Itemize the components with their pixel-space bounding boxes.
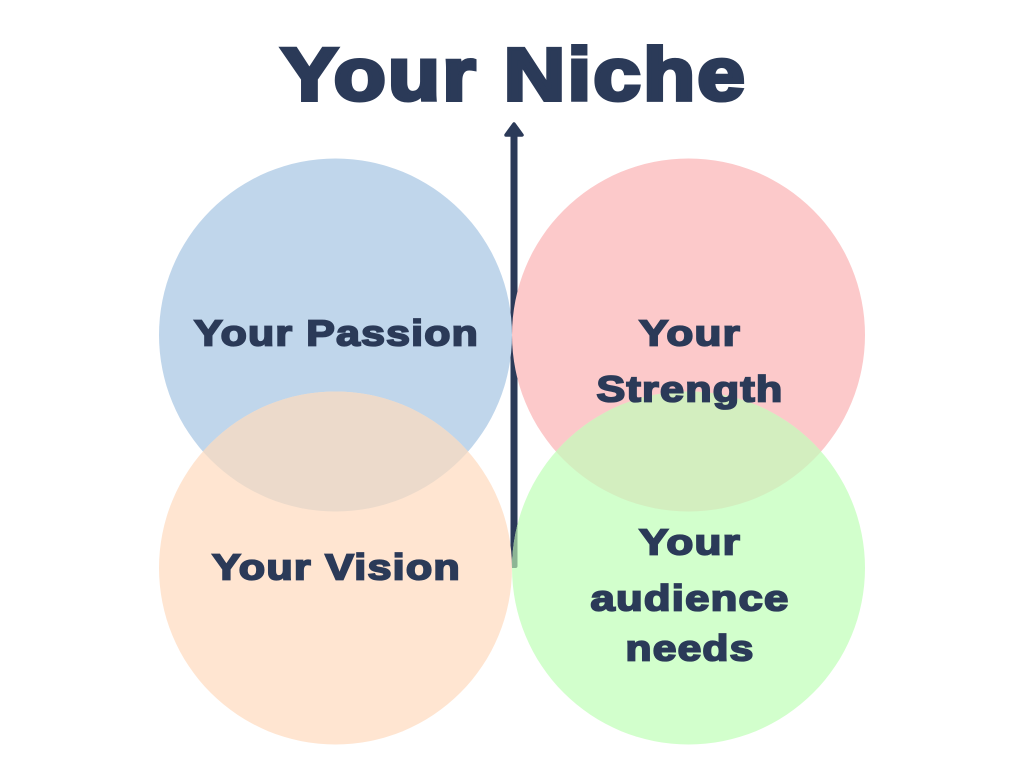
circle: your vision: [159, 392, 512, 744]
label: your strength: Strength: [596, 368, 784, 410]
label: your vision: Your Vision: [212, 546, 461, 588]
overlap: passion and vision: [203, 392, 468, 512]
label: your audience needs: [590, 522, 790, 668]
label: your audience needs: audience: [590, 578, 790, 618]
circle: your audience needs: [512, 392, 865, 744]
circle: your strength: [512, 158, 865, 512]
label: your strength: Your: [639, 312, 741, 354]
circle: your passion: [159, 158, 512, 512]
label: your strength: [596, 312, 784, 410]
label: your audience needs: Your: [639, 522, 741, 562]
label: your passion: Your Passion: [194, 312, 479, 354]
overlap: strength and audience needs: [556, 392, 821, 512]
arrow: [506, 124, 522, 568]
title: Your Niche: [281, 33, 747, 116]
label: your audience needs: needs: [626, 628, 754, 668]
arrow tail seen through green circle: [512, 524, 518, 568]
